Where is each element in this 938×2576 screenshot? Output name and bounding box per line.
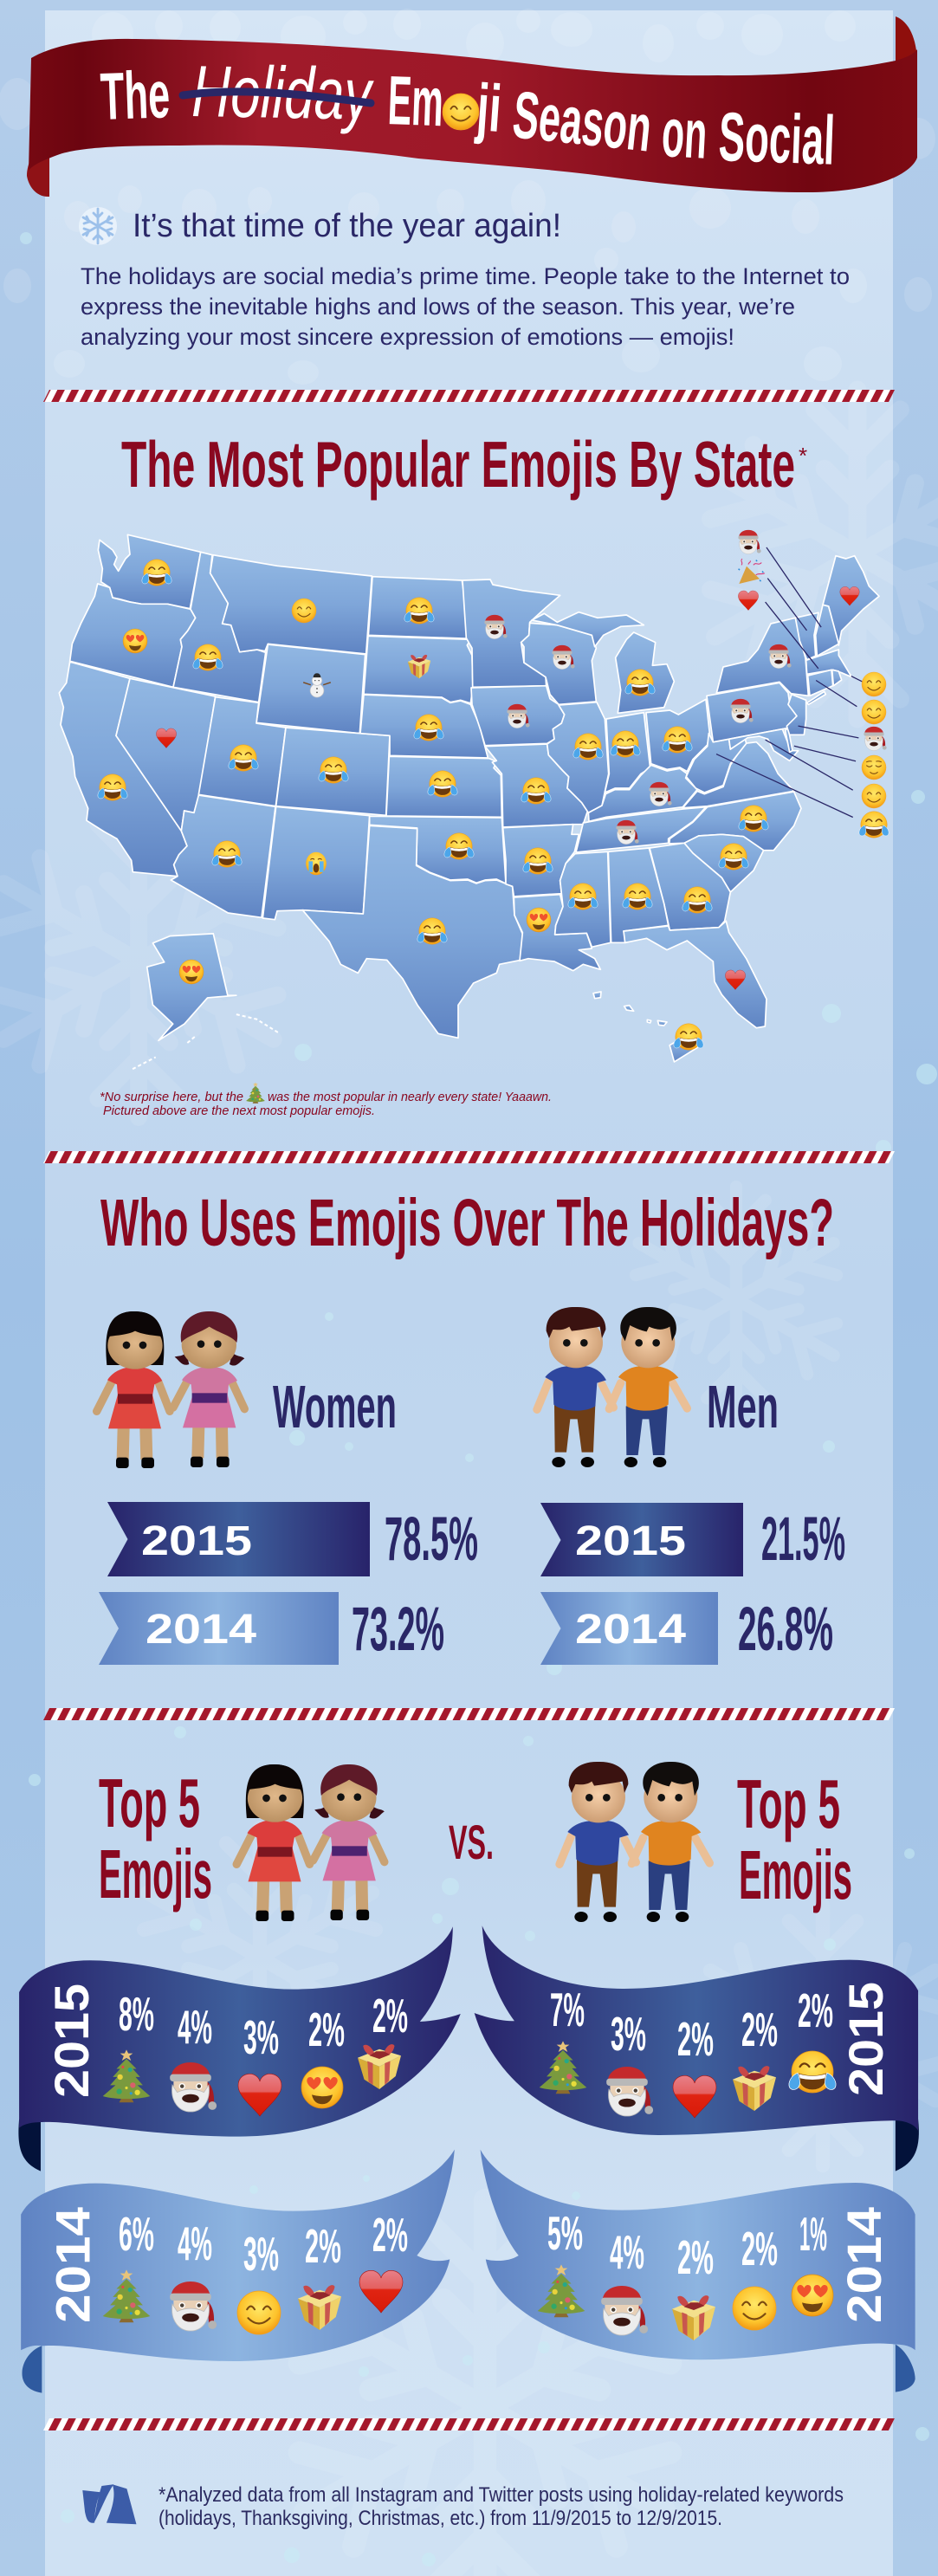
source note: [158, 2483, 844, 2530]
map footnote: *No surprise here, but the: [100, 1090, 243, 1104]
banner title text: [100, 50, 836, 179]
text: top 5 emojis left: Top 5: [99, 1764, 200, 1841]
banner title text: Season: [509, 77, 655, 166]
banner title text: Em: [386, 61, 444, 140]
alaska and hawaii: [147, 934, 700, 1062]
intro body text: express the inevitable highs and lows of the season. This year, we’re: [81, 294, 795, 320]
percentages: 4%: [178, 2000, 212, 2054]
map footnote: [100, 1083, 552, 1118]
intro body text: [81, 263, 850, 350]
banner title text: Holiday: [191, 50, 375, 135]
icon: women: [236, 1764, 385, 1921]
percentages: 4%: [610, 2225, 644, 2279]
percentages: 6%: [119, 2207, 154, 2261]
ribbon: men 2015: [475, 1926, 919, 2171]
top 5 versus header: Emojis: [99, 1835, 212, 1913]
percentages: 3%: [243, 2010, 279, 2064]
percentages: 3%: [611, 2007, 646, 2061]
emojis: [538, 2264, 833, 2340]
banner title text: ji: [474, 70, 504, 146]
percentages: [547, 2206, 827, 2284]
percentages: [119, 2207, 408, 2281]
bar: men 2015: [540, 1503, 743, 1576]
percentages: 2%: [798, 1984, 833, 2037]
ribbon: men 2014: 1%: [799, 2207, 827, 2261]
bar: men 2015: 2015: [575, 1518, 686, 1564]
percentages: 2%: [741, 2222, 778, 2275]
percentages: 2%: [677, 2012, 714, 2066]
label: women: Women: [273, 1373, 397, 1440]
year label: 2015: [838, 1982, 893, 2096]
logo: [82, 2484, 136, 2524]
bar: women 2015: [107, 1502, 370, 1576]
bar: men 2014: [540, 1592, 718, 1665]
percentages: 3%: [243, 2227, 279, 2281]
top 5 versus header: [99, 1762, 852, 1922]
bar: women 2014: [99, 1592, 339, 1665]
callout lines: [716, 547, 863, 817]
source note: *Analyzed data from all Instagram and Twitter posts using holiday-related keywords: [158, 2483, 844, 2507]
percentages: 2%: [677, 2230, 714, 2284]
bar: women 2015: 2015: [141, 1518, 252, 1564]
value: men 2014: 26.8%: [738, 1595, 833, 1664]
year label: 2015: [44, 1984, 99, 2098]
icon: women holding hands: [97, 1311, 244, 1468]
percentages: 2%: [305, 2219, 341, 2273]
emojis: [103, 2269, 403, 2334]
text: vs: VS.: [449, 1815, 494, 1869]
banner ribbon: [27, 16, 917, 197]
percentages: 2%: [372, 2208, 408, 2262]
men panel: [537, 1307, 845, 1665]
year label: 2014: [837, 2207, 891, 2323]
ribbon: men 2014: [481, 2150, 915, 2392]
map footnote: was the most popular in nearly every state! Yaaawn.: [268, 1090, 552, 1104]
percentages: 2%: [741, 2003, 778, 2056]
percentages: 7%: [550, 1983, 585, 2036]
percentages: [550, 1983, 833, 2066]
map footnote: Pictured above are the next most popular emojis.: [103, 1104, 375, 1118]
value: women 2014: 73.2%: [352, 1595, 444, 1664]
banner title text: Social: [717, 98, 836, 179]
icon: men: [560, 1762, 709, 1922]
intro heading: It’s that time of the year again!: [133, 208, 561, 244]
percentages: 5%: [547, 2206, 583, 2260]
percentages: 2%: [372, 1989, 408, 2042]
banner title text: The: [100, 57, 171, 134]
percentages: 2%: [308, 2003, 345, 2056]
intro body text: The holidays are social media’s prime time. People take to the Internet to: [81, 263, 850, 289]
bar: women 2014: 2014: [146, 1607, 256, 1653]
intro body text: analyzing your most sincere expression of emotions — emojis!: [81, 324, 734, 350]
bar: men 2014: 2014: [575, 1607, 686, 1653]
source note: (holidays, Thanksgiving, Christmas, etc.) from 11/9/2015 to 12/9/2015.: [158, 2507, 722, 2530]
state emojis: [98, 530, 889, 1050]
women panel: [97, 1311, 478, 1665]
text: top 5 emojis right: Top 5: [737, 1765, 840, 1842]
text: top 5 emojis left: [99, 1764, 212, 1913]
year label: 2014: [45, 2207, 100, 2323]
icon: men holding hands: [537, 1307, 687, 1467]
banner title text: on: [660, 94, 709, 173]
ribbon: women 2015: [18, 1926, 461, 2171]
icon: snowflake: [79, 207, 117, 245]
infographic canvas: 21.5%: [761, 1505, 845, 1574]
percentages: 8%: [119, 1987, 154, 2041]
percentages: [119, 1987, 408, 2064]
ribbon: women 2014: [21, 2150, 455, 2393]
text: top 5 emojis right: [737, 1765, 852, 1913]
emojis: [540, 2041, 836, 2118]
heading: most popular emojis by state: *: [799, 443, 807, 469]
emojis: [103, 2044, 401, 2116]
label: men: Men: [707, 1373, 779, 1440]
value: women 2015: 78.5%: [385, 1505, 478, 1574]
US map: [59, 534, 879, 1069]
percentages: 4%: [178, 2217, 212, 2270]
